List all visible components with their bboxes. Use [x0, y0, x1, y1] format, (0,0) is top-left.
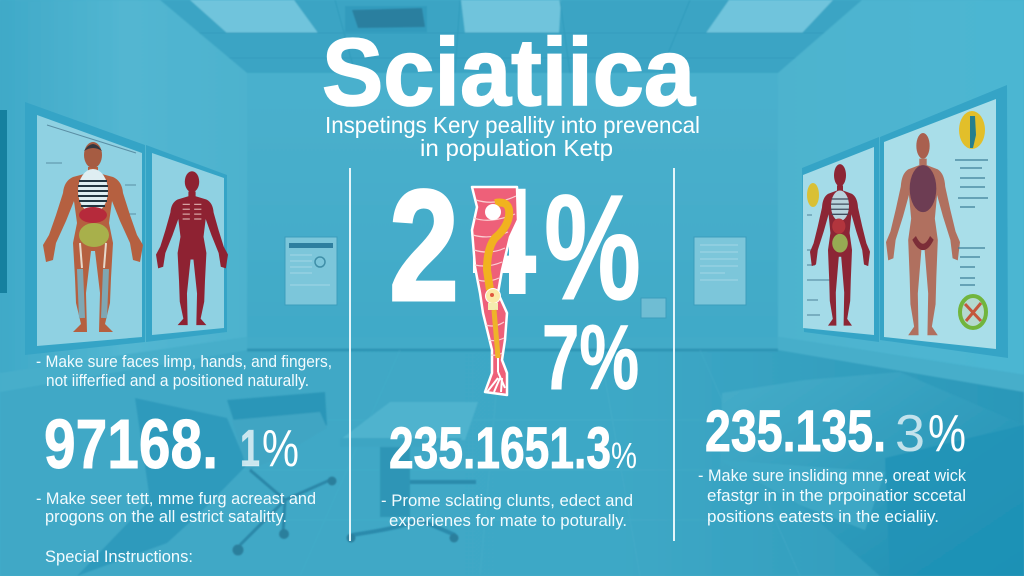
left note bottom: progons on the all estrict satalitty.	[45, 508, 287, 526]
small wall sign	[641, 298, 666, 318]
left statistic: 1	[240, 420, 260, 478]
icon: leg with sciatic nerve	[472, 187, 518, 395]
right note: efastgr in in the prpoinatior sccetal	[707, 487, 966, 505]
right sofa	[720, 372, 1024, 576]
left note bottom: - Make seer tett, mme furg acreast and	[36, 490, 316, 508]
subtitle: in population Ketp	[420, 135, 613, 161]
center note: experienes for mate to poturally.	[389, 512, 627, 530]
left statistic: %	[262, 420, 299, 478]
icon: yellow figure badge	[959, 111, 985, 149]
title: Sciatiica	[322, 19, 696, 126]
right poster 2: anatomy with icons	[880, 85, 1008, 358]
left note top: - Make sure faces limp, hands, and fingers,	[36, 353, 332, 371]
main statistic: %	[544, 163, 641, 331]
right note: positions eatests in the ecialiiy.	[707, 508, 939, 526]
main statistic	[389, 157, 641, 334]
far left poster edge	[0, 110, 7, 293]
left note bottom	[36, 490, 316, 526]
table	[340, 402, 478, 542]
left poster 1: anatomy	[25, 102, 145, 355]
left note top: not iifferfied and a positioned naturally.	[46, 372, 309, 390]
icon: prohibition badge	[960, 296, 986, 328]
column divider left	[349, 168, 351, 541]
right note: - Make sure insliding mne, oreat wick	[698, 467, 967, 485]
main statistic: 4	[472, 157, 536, 325]
left chair	[77, 392, 336, 576]
center statistic: 235.1651.3	[389, 416, 611, 481]
wall notice left	[285, 237, 337, 305]
column divider right	[673, 168, 675, 541]
main statistic: 2	[389, 158, 459, 334]
right statistic: 235.135.	[705, 399, 886, 464]
left poster 2: muscle figure	[146, 145, 228, 342]
left statistic: 97168.	[44, 405, 218, 483]
right poster 1: anatomy	[802, 137, 879, 342]
subtitle: Inspetings Kery peallity into prevencal	[325, 112, 700, 138]
center note	[381, 492, 633, 530]
subtitle	[325, 112, 700, 161]
right note	[698, 467, 967, 526]
center statistic: %	[611, 435, 637, 476]
left note top	[36, 353, 332, 390]
center note: - Prome sclating clunts, edect and	[381, 492, 633, 510]
special instructions: Special Instructions:	[45, 548, 193, 566]
wall notice right	[694, 237, 746, 305]
right statistic: 3	[895, 405, 925, 463]
right statistic: %	[928, 405, 966, 463]
secondary statistic: 7%	[542, 307, 639, 409]
